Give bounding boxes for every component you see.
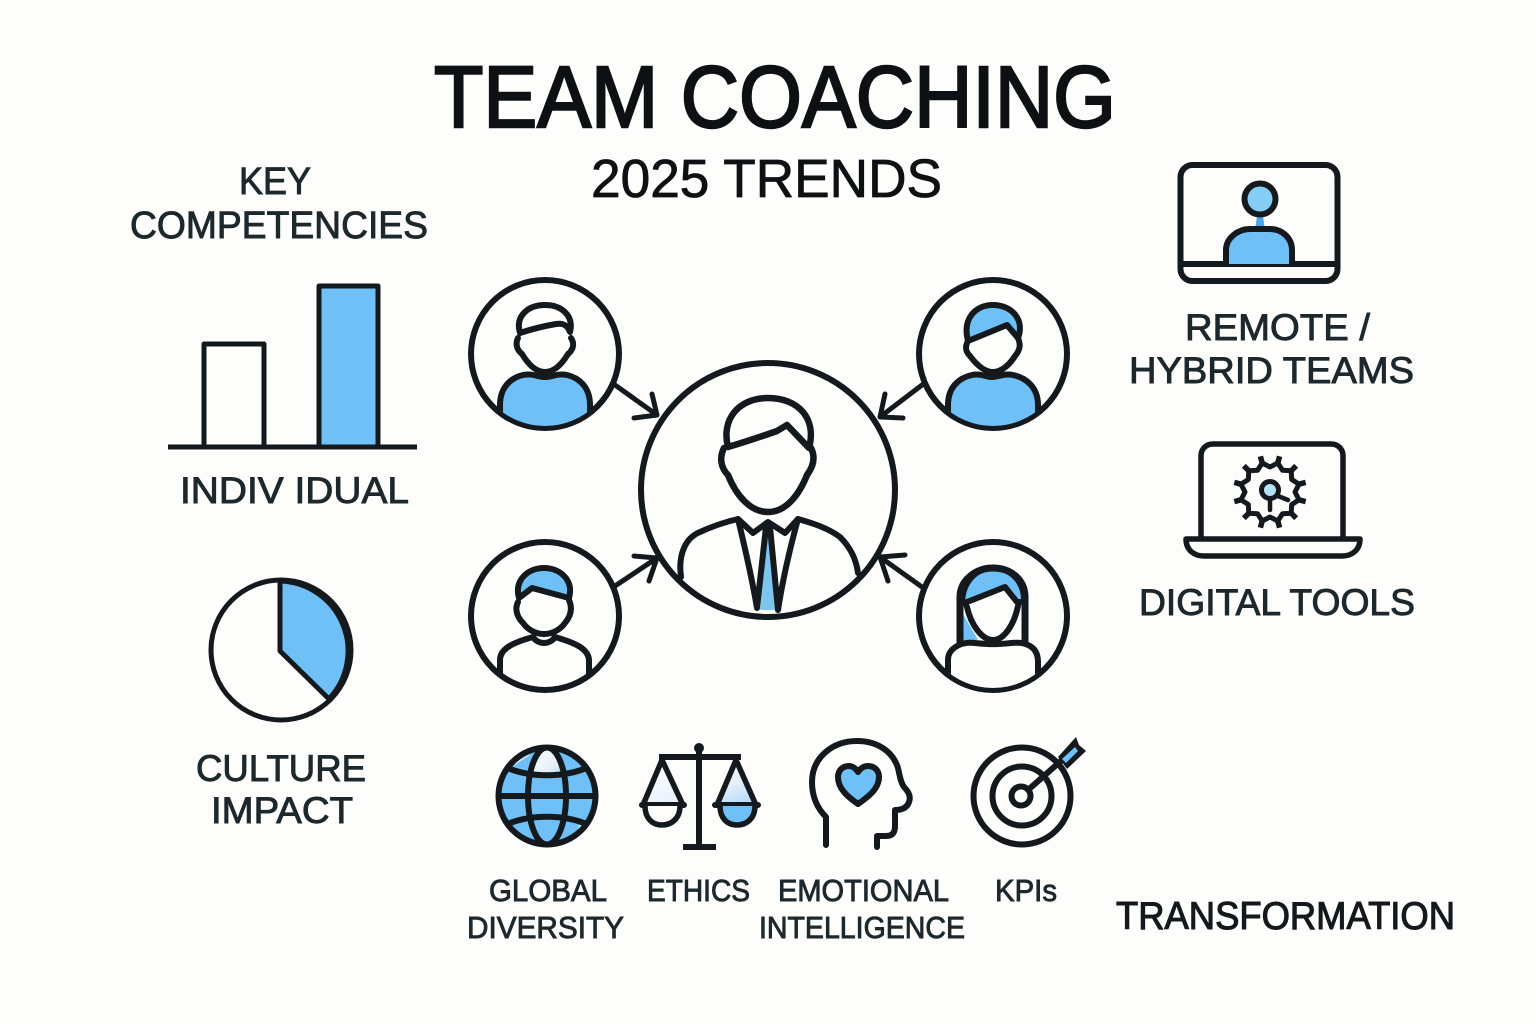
subtitle: 2025 TRENDS: [591, 149, 942, 209]
label: transformation: TRANSFORMATION: [1116, 895, 1455, 938]
labels: bottom row: [467, 873, 1057, 945]
icon: head with heart: [812, 741, 910, 847]
coach tie: [760, 527, 776, 610]
team member: top left: [471, 280, 619, 440]
label: culture impact: IMPACT: [211, 790, 353, 831]
globe highlights: [502, 750, 592, 842]
pie chart: culture impact: [211, 580, 351, 720]
icon: target with arrow: [974, 737, 1086, 844]
label: remote hybrid teams: HYBRID TEAMS: [1129, 350, 1414, 391]
heading: key competencies: [130, 161, 428, 247]
arrow: top left to centre: [615, 385, 657, 418]
labels: bottom row: KPIs: [995, 873, 1057, 908]
label: culture impact: CULTURE: [196, 748, 366, 789]
label: digital tools: DIGITAL TOOLS: [1139, 582, 1415, 623]
label: individual: INDIV IDUAL: [180, 470, 409, 511]
labels: bottom row: GLOBAL: [489, 873, 607, 908]
label: remote hybrid teams: [1129, 307, 1414, 391]
central coach icon: [641, 363, 895, 617]
labels: bottom row: ETHICS: [647, 873, 750, 908]
label: culture impact: [196, 748, 366, 831]
coach face: [721, 448, 814, 512]
labels: bottom row: DIVERSITY: [467, 910, 624, 945]
label: remote hybrid teams: REMOTE /: [1185, 307, 1371, 348]
coach suit: [680, 519, 858, 577]
coach hair: [726, 398, 811, 448]
icon: laptop with gear: [1186, 444, 1360, 556]
arrow: bottom right to centre: [880, 555, 922, 587]
icon: video call screen: [1180, 165, 1338, 281]
labels: bottom row: INTELLIGENCE: [759, 910, 965, 945]
coach lapels and tie edges: [738, 519, 798, 610]
icon: scales: [642, 743, 758, 847]
team member: bottom right: [919, 542, 1067, 700]
bar chart: individual: [168, 286, 417, 447]
arrow: top right to centre: [880, 385, 922, 418]
icon: globe: [498, 744, 598, 850]
heading: key competencies: KEY: [239, 161, 311, 203]
title: TEAM COACHING: [434, 49, 1116, 146]
team member: bottom left: [471, 542, 619, 690]
arrow: bottom left to centre: [615, 556, 657, 586]
team member: top right: [919, 280, 1067, 440]
labels: bottom row: EMOTIONAL: [778, 873, 949, 908]
heading: key competencies: COMPETENCIES: [130, 205, 428, 247]
gear: [1234, 456, 1306, 528]
